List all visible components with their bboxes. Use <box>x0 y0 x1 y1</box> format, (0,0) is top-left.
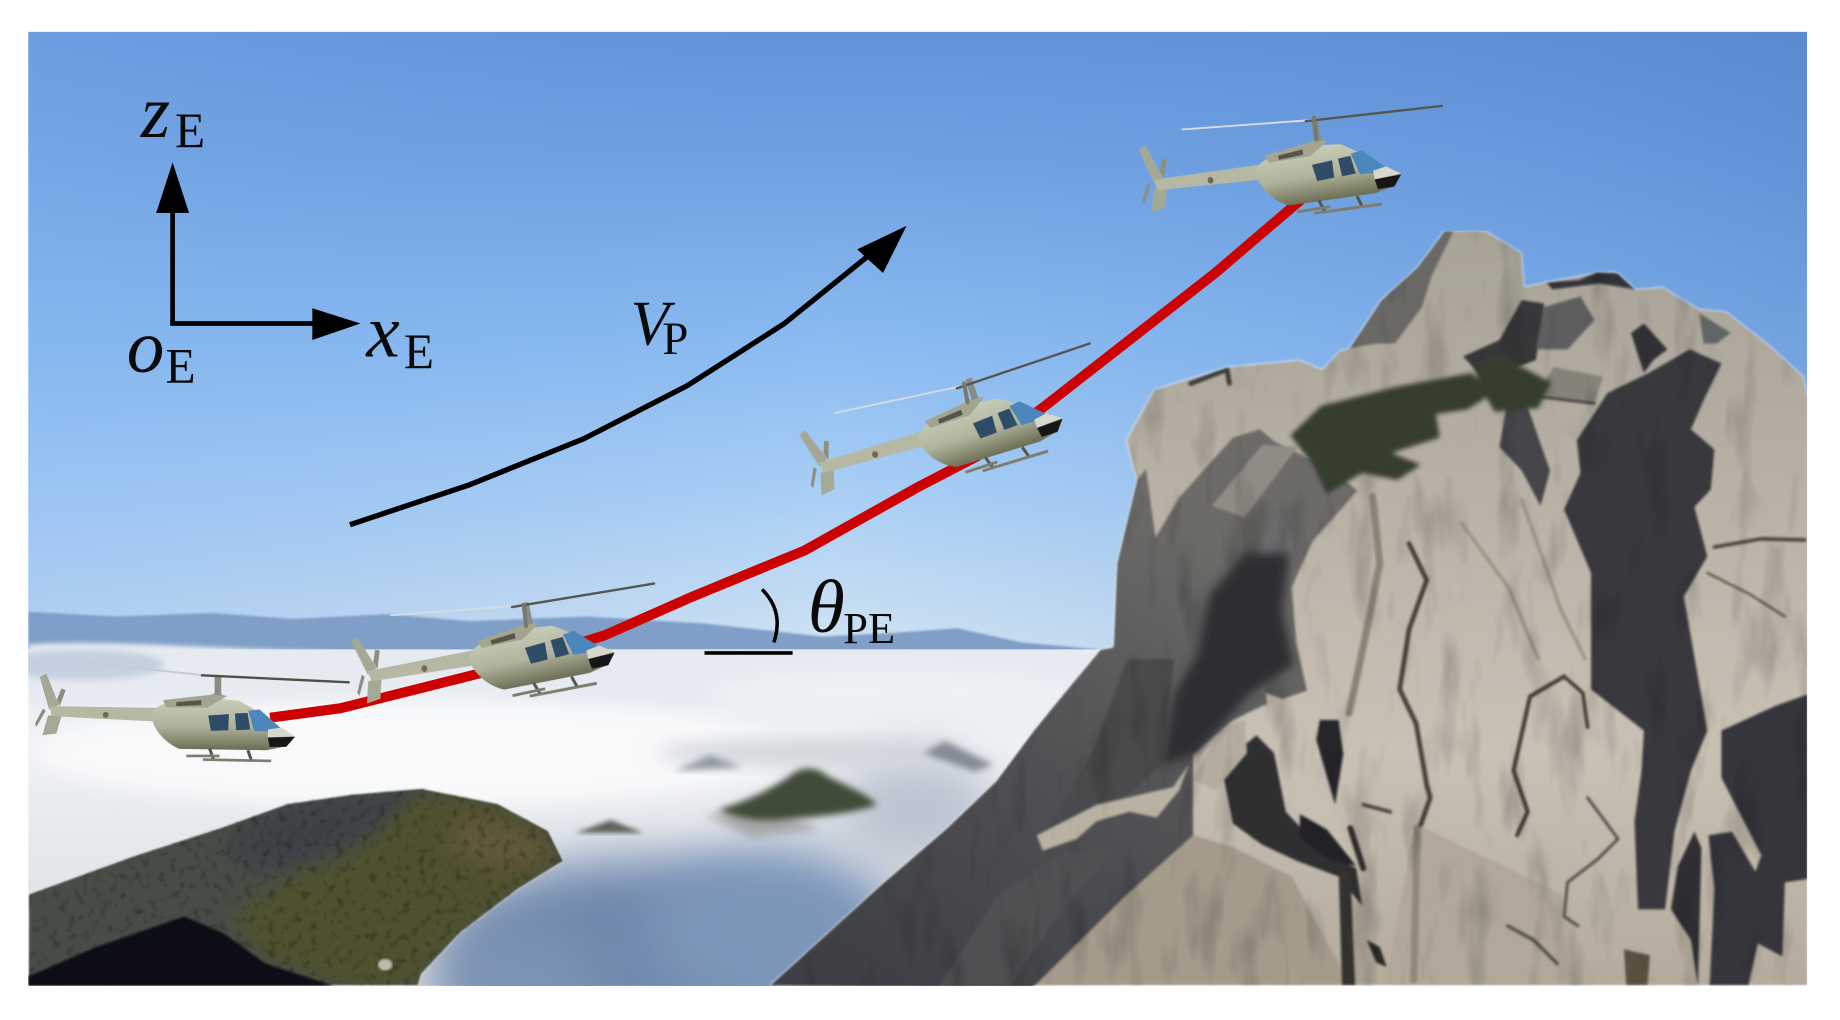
rotor 1 <box>82 662 349 682</box>
lower right dark blocks <box>1708 694 1808 986</box>
forest dark base <box>28 916 333 986</box>
white speck <box>378 959 392 971</box>
dark central crevice <box>1564 349 1721 909</box>
helicopter 2 <box>351 602 615 704</box>
label: velocity: P <box>662 313 688 365</box>
left crevice bits <box>1499 404 1550 506</box>
rock silhouette <box>1043 230 1808 986</box>
red flight path <box>270 198 1303 718</box>
label: z axis: E <box>175 103 205 158</box>
lower lit rock <box>1031 835 1350 986</box>
sea of clouds <box>28 640 1120 986</box>
label: origin: E <box>166 338 196 393</box>
label: origin: o <box>127 306 164 389</box>
rock cracks <box>1191 369 1805 980</box>
flight angle marker <box>705 589 793 653</box>
rotor 4 <box>1182 106 1442 139</box>
helicopter 1 <box>35 673 295 761</box>
label: velocity: V <box>631 288 676 359</box>
helicopter 4 <box>1138 121 1402 215</box>
helicopter 3 <box>800 377 1063 496</box>
label: x axis: E <box>404 324 434 379</box>
upper right boulder shading <box>1536 296 1595 349</box>
label: flight path angle: θ <box>808 566 845 649</box>
axis arrows <box>156 162 360 340</box>
label: z axis: z <box>140 71 170 154</box>
distant blue mountains <box>28 611 1098 652</box>
velocity arrow <box>350 226 906 525</box>
spire shade <box>1349 231 1454 348</box>
light streak on face <box>1037 764 1189 851</box>
granite rock peak <box>769 231 1808 989</box>
sky <box>28 32 1807 667</box>
rotor 3 <box>835 344 1090 413</box>
shaded left face <box>769 429 1357 989</box>
spire gap <box>1463 300 1544 380</box>
forested foreground mountain <box>28 776 580 988</box>
lit strip on face <box>1212 445 1298 518</box>
dark core shadow on face <box>1162 553 1294 765</box>
rotor 2 <box>391 584 654 626</box>
small peaks in clouds <box>575 741 993 838</box>
vegetation on rock <box>1290 355 1551 494</box>
boulder lumps and shadows <box>1221 735 1362 906</box>
label: x axis: x <box>365 290 400 373</box>
label: flight path angle: PE <box>843 603 895 653</box>
